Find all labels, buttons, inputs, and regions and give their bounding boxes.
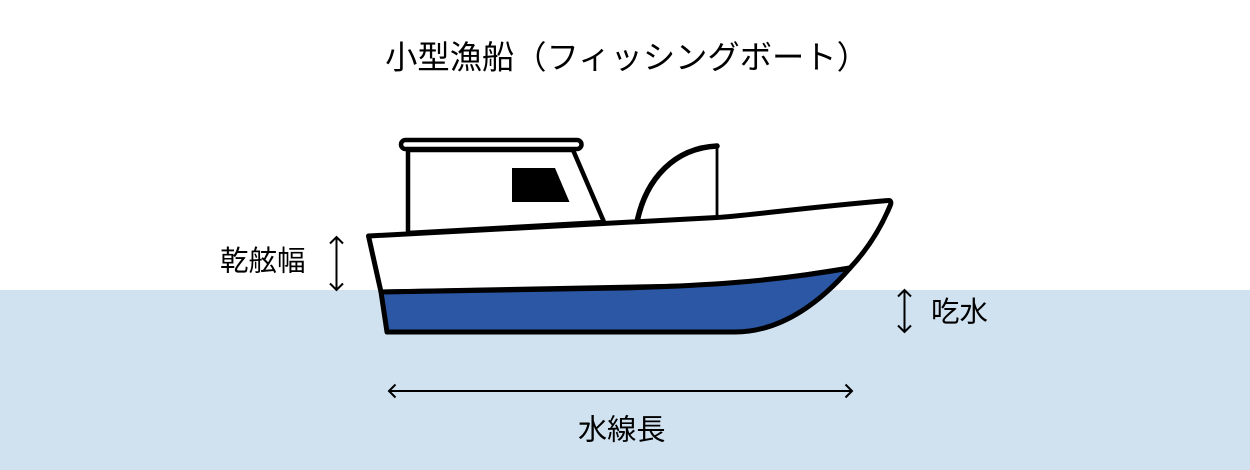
arrow: freeboard [330, 237, 343, 290]
cabin [408, 150, 604, 233]
water background [0, 290, 1250, 470]
title: 小型漁船（フィッシングボート） [385, 40, 869, 76]
hull upper white [368, 200, 891, 292]
label: freeboard: 乾舷幅 [220, 246, 306, 278]
cabin window [512, 168, 570, 202]
sail shelter [637, 146, 717, 222]
label: draft: 吃水 [931, 296, 988, 328]
icon: fishing boat [368, 140, 891, 332]
arrow: waterline length [389, 384, 852, 398]
label: waterline length: 水線長 [578, 414, 666, 446]
arrow: draft [898, 290, 911, 332]
cabin roof rail [401, 140, 582, 149]
hull lower blue [381, 268, 850, 332]
